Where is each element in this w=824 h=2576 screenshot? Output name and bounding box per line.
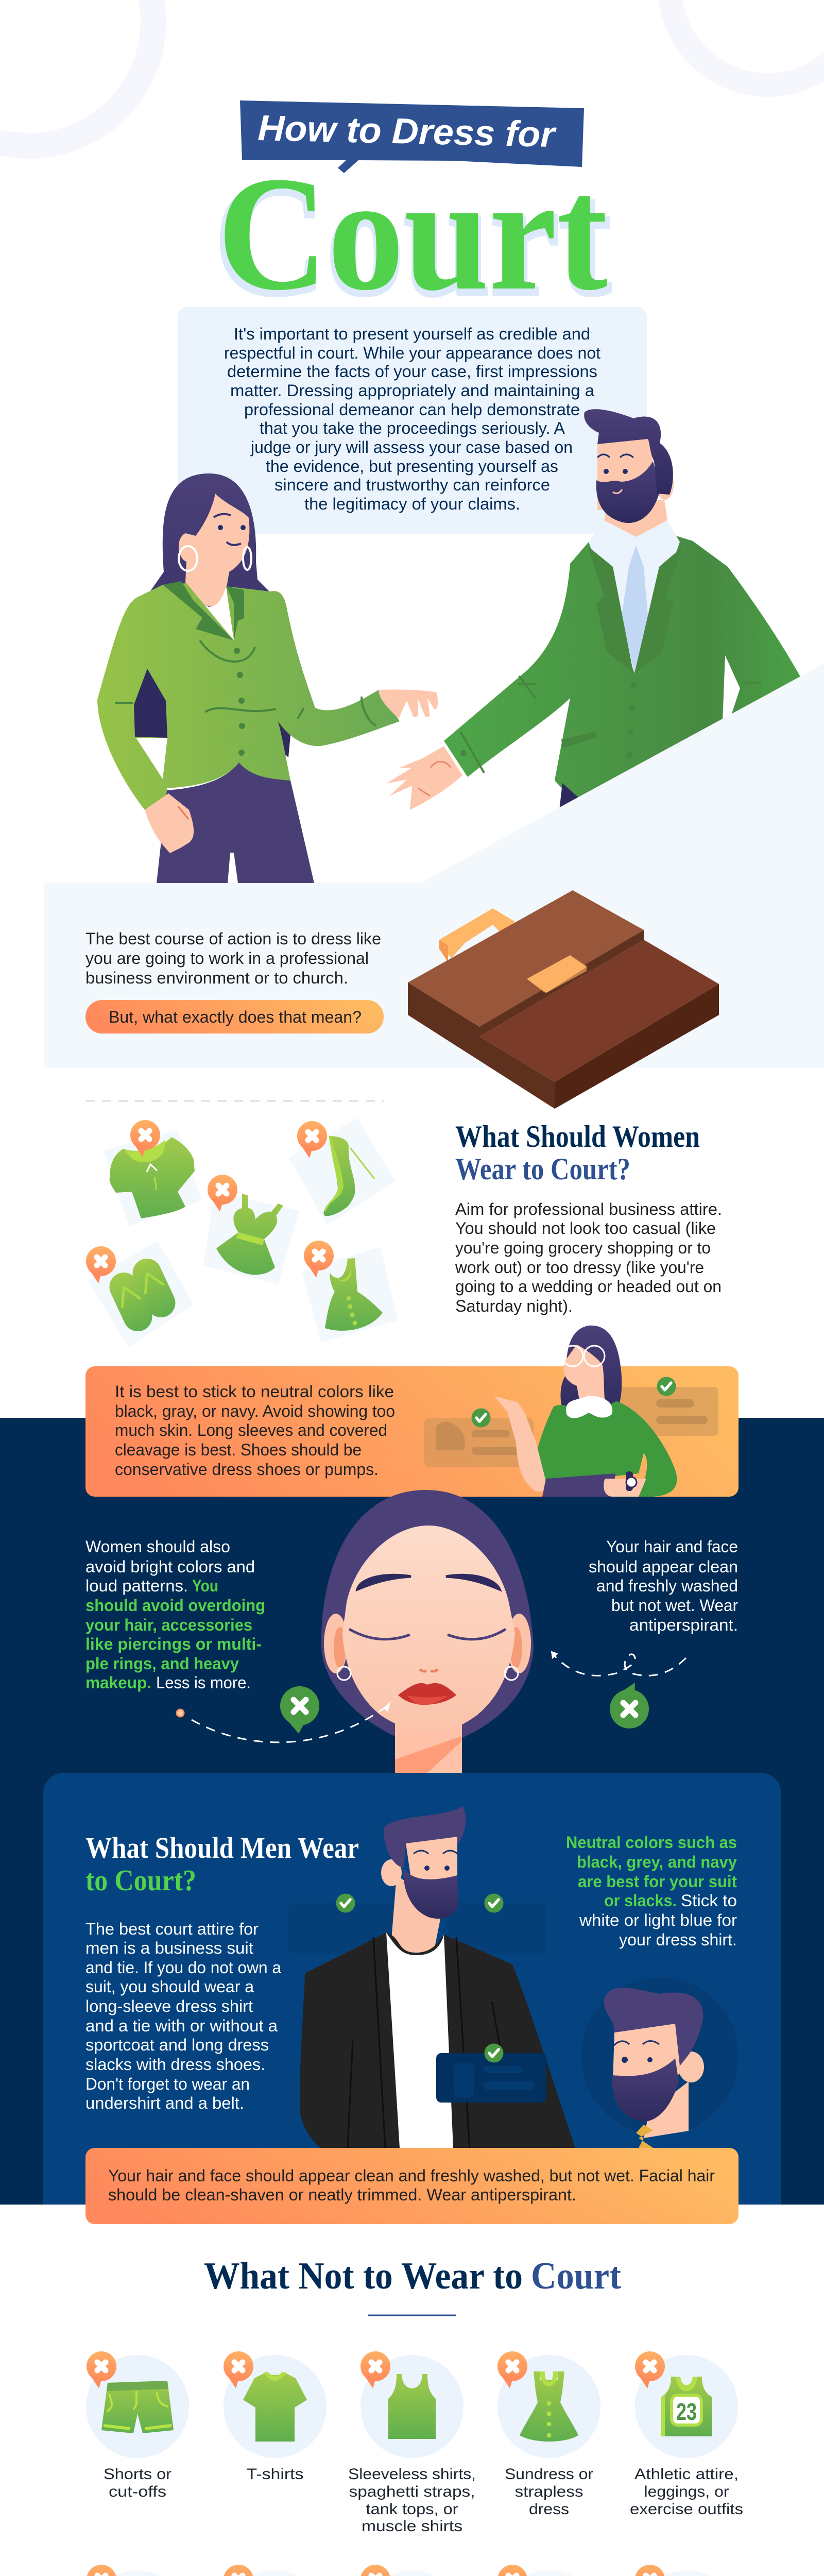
text: women avoid bright colours: loud patterns. (85, 1577, 188, 1595)
text: aim for professional attire: You should not look too casual (like (455, 1219, 716, 1238)
item: shorts (86, 2351, 189, 2500)
callout: but what does that mean: But, what exactly does that mean? (109, 1008, 362, 1026)
panel: introduction (178, 307, 647, 534)
text: aim for professional attire: you're going grocery shopping or to (455, 1239, 711, 1257)
text: best attire for men: Don't forget to wear an (85, 2075, 250, 2093)
decorative ring top right (670, 0, 824, 85)
icon: briefcase (408, 890, 719, 1109)
title: Court (214, 148, 612, 329)
item: crop tops (635, 2565, 738, 2576)
item: sleeveless shirts: muscle shirts (362, 2518, 462, 2535)
figure: man head with trimmed beard (581, 1977, 739, 2148)
text: women avoid bright colours: your hair, accessories (85, 1616, 252, 1634)
text: best attire for men: slacks with dress shoes. (85, 2055, 265, 2074)
item: sleeveless shirts: tank tops, or (366, 2501, 458, 2518)
text: hair and face clean (589, 1537, 738, 1634)
text: aim for professional attire: Aim for professional business attire. (455, 1200, 722, 1218)
text: best attire for men (85, 1920, 281, 2112)
item: sleeveless shirts: Sleeveless shirts, (348, 2466, 476, 2483)
item: sundress: strapless (515, 2483, 583, 2500)
panel: dress like a professional (44, 664, 824, 1068)
text: women avoid bright colours: should avoid overdoing (85, 1596, 265, 1615)
panel: neutral colours banner: conservative dress shoes or pumps. (115, 1460, 379, 1479)
heading: what should women wear: Wear to Court? (455, 1152, 630, 1186)
item: sundress: Sundress or (505, 2466, 593, 2483)
panel: introduction: that you take the proceedings seriously. A (260, 419, 565, 437)
figure: woman face close-up (321, 1490, 534, 1773)
text: women avoid bright colours: makeup. (85, 1673, 151, 1692)
text: women avoid bright colours: like piercings or multi- (85, 1635, 262, 1653)
text: neutral colours for suits: black, grey, and navy (577, 1853, 737, 1871)
panel: hair and face banner: should be clean-shaven or neatly trimmed. Wear antiperspirant. (108, 2185, 576, 2204)
panel: dress like a professional: you are going to work in a professional (85, 949, 369, 968)
item: shorts: cut-offs (109, 2483, 166, 2500)
text: best attire for men: and a tie with or without a (85, 2016, 278, 2035)
text: women avoid bright colours: Women should also (85, 1537, 230, 1556)
text: neutral colours for suits: are best for your suit (578, 1872, 737, 1891)
item: athletic attire (630, 2351, 743, 2518)
item: dressy or sexy (224, 2565, 327, 2576)
panel: introduction: the evidence, but presenting yourself as (266, 457, 558, 476)
text: neutral colours for suits (566, 1833, 737, 1949)
panel: introduction: judge or jury will assess your case based on (250, 438, 573, 456)
divider (85, 1100, 384, 1101)
item: sundress (497, 2351, 600, 2518)
item: form-fitting or baggy (355, 2565, 469, 2576)
panel: introduction: sincere and trustworthy can reinforce (274, 476, 550, 494)
navy section background (0, 1418, 824, 2205)
title: How to Dress for (258, 108, 557, 155)
panel: introduction: matter. Dressing appropriately and maintaining a (230, 381, 594, 400)
item: t-shirts: T-shirts (246, 2466, 304, 2483)
icons: women clothing to avoid (86, 1118, 398, 1347)
text: women avoid bright colours: avoid bright colors and (85, 1557, 255, 1576)
panel: introduction: professional demeanor can help demonstrate (244, 400, 580, 419)
arrow: dashed pointer to lips (177, 1686, 390, 1742)
text: aim for professional attire: going to a wedding or headed out on (455, 1277, 722, 1296)
item: athletic attire: exercise outfits (630, 2501, 743, 2518)
item: athletic attire: Athletic attire, (634, 2466, 739, 2483)
panel: hair and face banner (85, 2148, 739, 2224)
text: best attire for men: undershirt and a belt. (85, 2094, 244, 2112)
panel: introduction: It's important to present yourself as credible and (234, 325, 590, 343)
heading: what should men wear: What Should Men Wear (85, 1831, 359, 1865)
text: best attire for men: The best court attire for (85, 1920, 259, 1938)
panel: neutral colours banner: much skin. Long sleeves and covered (115, 1421, 387, 1439)
panel: neutral colours banner: black, gray, or navy. Avoid showing too (115, 1402, 395, 1420)
text: best attire for men: suit, you should wear a (85, 1977, 254, 1996)
text: aim for professional attire: Saturday night). (455, 1297, 573, 1315)
heading: what should women wear (455, 1120, 700, 1186)
text: hair and face clean: Your hair and face (606, 1537, 738, 1556)
callout: but what does that mean (85, 1000, 384, 1033)
text: women avoid bright colours: ple rings, and heavy (85, 1654, 239, 1673)
text: best attire for men: sportcoat and long dress (85, 2036, 269, 2054)
decorative ring top left (0, 0, 153, 146)
text: women avoid bright colours: Less is more. (156, 1673, 251, 1692)
panel: introduction: respectful in court. While your appearance does not (224, 344, 600, 362)
figure: man in green suit (386, 409, 824, 819)
figure: woman with glasses (424, 1326, 718, 1497)
text: neutral colours for suits: Neutral colors such as (566, 1833, 737, 1852)
item: too short (483, 2565, 615, 2576)
item: athletic attire: leggings, or (644, 2483, 729, 2500)
text: neutral colours for suits: Stick to (681, 1891, 737, 1910)
figure: woman in green jacket (97, 473, 438, 883)
heading: what should men wear (85, 1831, 359, 1897)
panel: introduction: the legitimacy of your claims. (304, 495, 520, 513)
item: sundress: dress (529, 2501, 569, 2518)
text: best attire for men: long-sleeve dress shirt (85, 1997, 253, 2015)
text: best attire for men: men is a business suit (85, 1939, 253, 1957)
figure: man in black jacket (288, 1806, 575, 2148)
text: neutral colours for suits: your dress shirt. (619, 1930, 737, 1949)
text: hair and face clean: antiperspirant. (629, 1616, 738, 1634)
heading: what should women wear: What Should Women (455, 1120, 700, 1154)
text: best attire for men: and tie. If you do not own a (85, 1958, 281, 1977)
panel: hair and face banner: Your hair and face should appear clean and freshly washed, but not wet. Facial hair (108, 2166, 715, 2185)
text: women avoid bright colours (85, 1537, 265, 1692)
text: hair and face clean: and freshly washed (596, 1577, 738, 1595)
text: women avoid bright colours: You (192, 1577, 218, 1595)
arrow: dashed pointer to hair (552, 1652, 686, 1728)
text: neutral colours for suits: or slacks. (604, 1891, 677, 1910)
item: sleeveless shirts (348, 2351, 476, 2535)
item: undergarments (81, 2565, 194, 2576)
text: neutral colours for suits: white or light blue for (579, 1911, 737, 1929)
text: aim for professional attire (455, 1200, 722, 1315)
text: hair and face clean: should appear clean (589, 1557, 738, 1576)
panel: neutral colours banner (85, 1326, 739, 1497)
panel: neutral colours banner: cleavage is best. Shoes should be (115, 1440, 362, 1459)
text: hair and face clean: but not wet. Wear (611, 1596, 738, 1615)
panel: dress like a professional: The best course of action is to dress like (85, 929, 381, 948)
panel: dress like a professional: business environment or to church. (85, 969, 348, 987)
item: shorts: Shorts or (104, 2466, 171, 2483)
panel: neutral colours banner: It is best to stick to neutral colors like (115, 1382, 394, 1401)
panel: introduction: determine the facts of your case, first impressions (227, 362, 597, 381)
text: aim for professional attire: work out) or too dressy (like you're (455, 1258, 704, 1277)
title: Court (217, 143, 609, 324)
heading: what not to wear: What Not to Wear to (204, 2255, 523, 2297)
heading: what should men wear: to Court? (85, 1863, 196, 1897)
panel: men (43, 1773, 781, 2205)
item: sleeveless shirts: spaghetti straps, (349, 2483, 475, 2500)
item: t-shirts (224, 2351, 327, 2483)
heading: what not to wear: Court (531, 2255, 621, 2297)
